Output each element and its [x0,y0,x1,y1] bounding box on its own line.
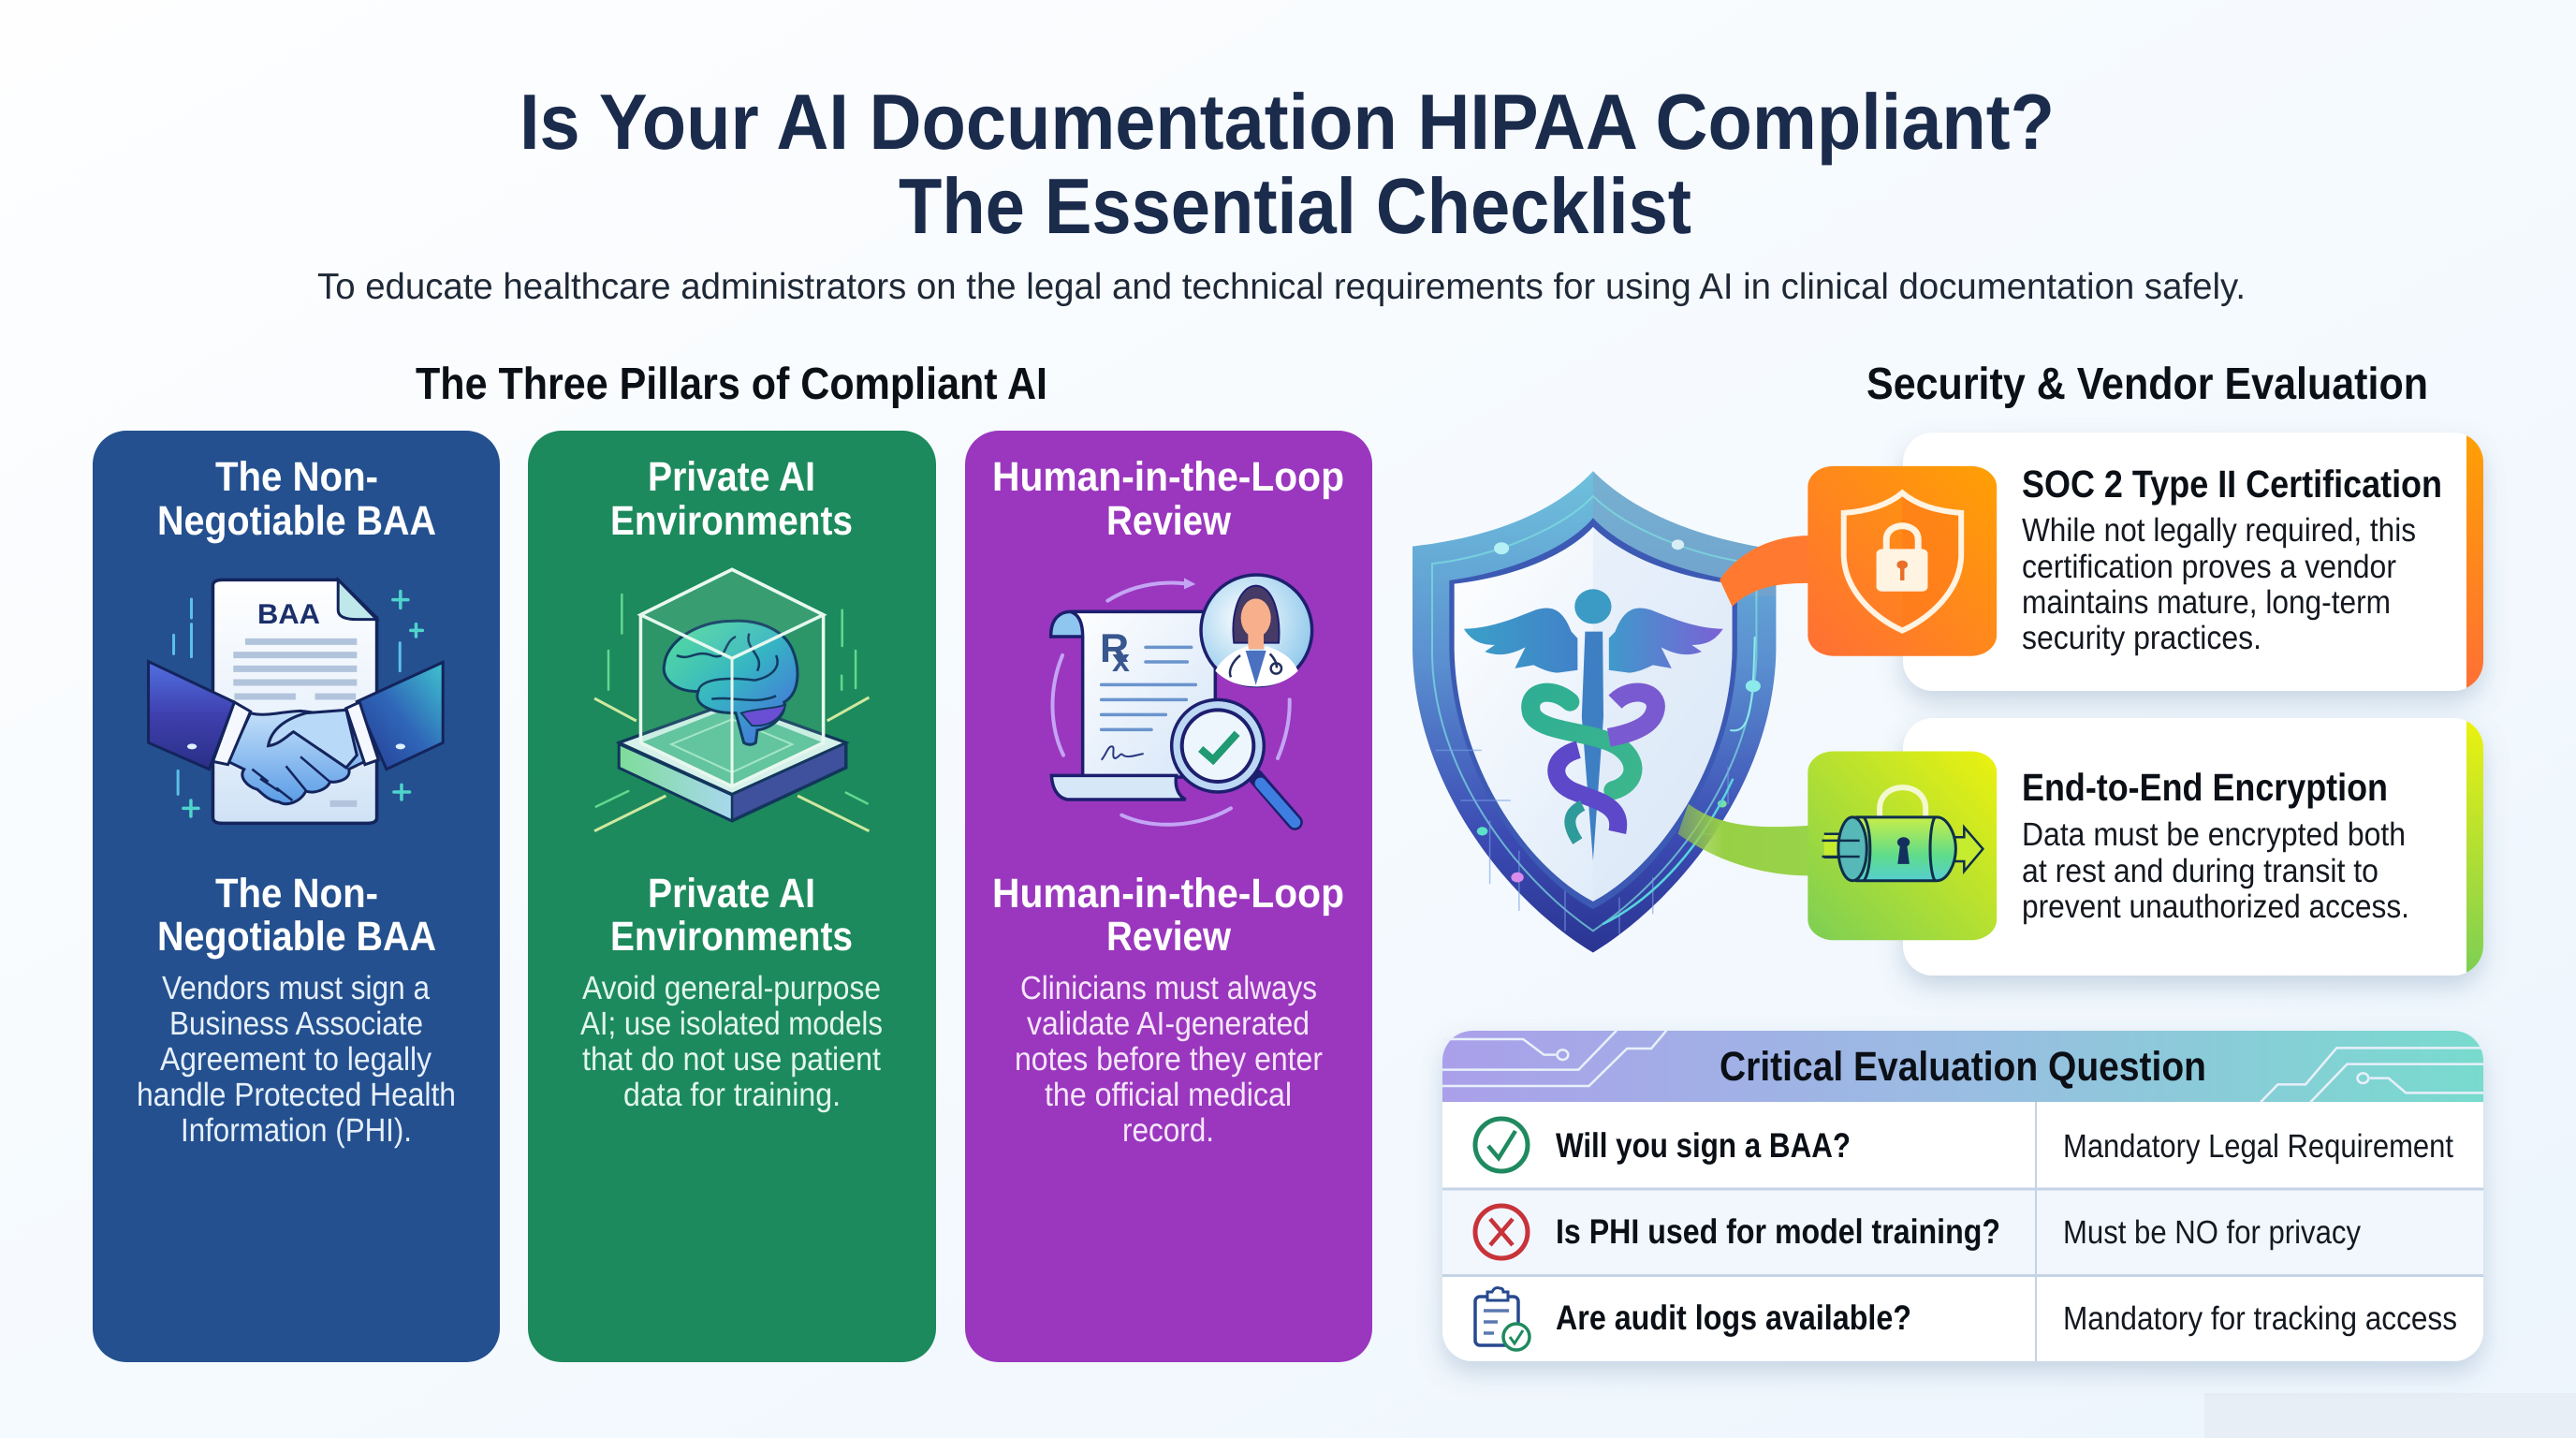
shaded row [1442,1188,2483,1275]
card body text [2022,512,2416,656]
card body text: that do not use patient [582,1041,881,1078]
card body text: maintains mature, long-term [2022,584,2391,621]
card body text [1015,970,1323,1149]
card repeated heading [157,871,436,960]
card body text: the official medical [1045,1077,1292,1113]
answer: Mandatory Legal Requirement [2063,1128,2453,1165]
answer: Must be NO for privacy [2063,1214,2361,1251]
card repeated heading: Human-in-the-Loop [992,871,1344,917]
card heading: Environments [610,498,853,544]
icon label: BAA: BAA [257,599,320,630]
icon: brain in glass cube [594,569,869,831]
card repeated heading: Environments [610,914,853,960]
card body text: notes before they enter [1015,1041,1323,1078]
card body text: security practices. [2022,620,2261,656]
color strip [2466,718,2483,976]
card body text: Information (PHI). [181,1112,412,1149]
card body text: prevent unauthorized access. [2022,888,2409,925]
card heading: Review [1106,498,1232,544]
arrow: green connector [1678,804,1809,875]
card heading: Human-in-the-Loop [992,454,1344,500]
card repeated heading: Private AI [648,871,815,917]
row: will you sign a BAA [1475,1119,2453,1171]
card body text: While not legally required, this [2022,512,2416,549]
card body text: record. [1122,1112,1214,1149]
card body text: Business Associate [169,1005,423,1042]
card body text: at rest and during transit to [2022,853,2378,889]
icon: orange shield lock [1808,466,1997,656]
card heading: The Non- [215,454,378,500]
card body text: data for training. [623,1077,841,1113]
corner patch [2204,1393,2576,1438]
icon: caduceus shield [1412,471,1776,952]
table heading: Critical Evaluation Question [1720,1044,2206,1090]
icon: prescription review with doctor and magnifier [1051,575,1312,825]
card: end-to-end encryption [1903,718,2483,976]
icon: red cross [1475,1206,1528,1258]
icon: green check [1475,1119,1528,1171]
arrow: orange connector [1720,536,1809,607]
card body text: Agreement to legally [160,1041,432,1078]
card heading: SOC 2 Type II Certification [2022,462,2442,506]
panel: the non-negotiable BAA [93,431,500,1362]
card body text: Avoid general-purpose [582,970,881,1006]
card body text: certification proves a vendor [2022,549,2396,585]
icon label: Rx: x [1112,643,1130,679]
title: The Essential Checklist [899,162,1691,250]
card repeated heading: Negotiable BAA [157,914,436,960]
card heading [610,454,853,544]
card repeated heading [610,871,853,960]
table header band [1442,1031,2483,1102]
answer: Mandatory for tracking access [2063,1300,2457,1337]
card body text: AI; use isolated models [580,1005,883,1042]
card repeated heading: The Non- [215,871,378,917]
heading: three pillars: The Three Pillars of Compliant AI [416,360,1047,409]
card body text: Vendors must sign a [162,970,430,1006]
card repeated heading: Review [1106,914,1232,960]
subtitle: To educate healthcare administrators on the legal and technical requirements for using AI in clinical documentation safely. [317,267,2246,307]
card: SOC 2 certification [1903,433,2483,691]
question: Will you sign a BAA? [1556,1126,1851,1165]
panel: human-in-the-loop review [965,431,1372,1362]
icon: clipboard with check [1475,1288,1530,1350]
card heading [157,454,436,544]
card heading: Private AI [648,454,815,500]
heading: security and vendor evaluation: Security & Vendor Evaluation [1866,360,2428,409]
card heading: End-to-End Encryption [2022,766,2388,809]
card body text [2022,816,2409,925]
card heading: Negotiable BAA [157,498,436,544]
row: are audit logs available [1475,1288,2457,1350]
color strip [2466,433,2483,691]
icon: green encryption cylinder [1808,751,1997,940]
card body text: Clinicians must always [1020,970,1317,1006]
icon label: Rx: R [1100,626,1129,671]
question: Are audit logs available? [1556,1299,1911,1337]
question: Is PHI used for model training? [1556,1212,2000,1251]
card body text [580,970,883,1113]
card body text [137,970,456,1149]
table: critical evaluation question [1442,1031,2483,1361]
icon: BAA document with handshake [149,580,443,823]
card body text: handle Protected Health [137,1077,456,1113]
panel: private AI environments [528,431,936,1362]
title [520,78,2055,250]
card body text: Data must be encrypted both [2022,816,2406,853]
card repeated heading [992,871,1344,960]
card body text: validate AI-generated [1027,1005,1310,1042]
title: Is Your AI Documentation HIPAA Compliant? [520,78,2055,166]
card heading [992,454,1344,544]
row: is PHI used for model training [1475,1206,2361,1258]
